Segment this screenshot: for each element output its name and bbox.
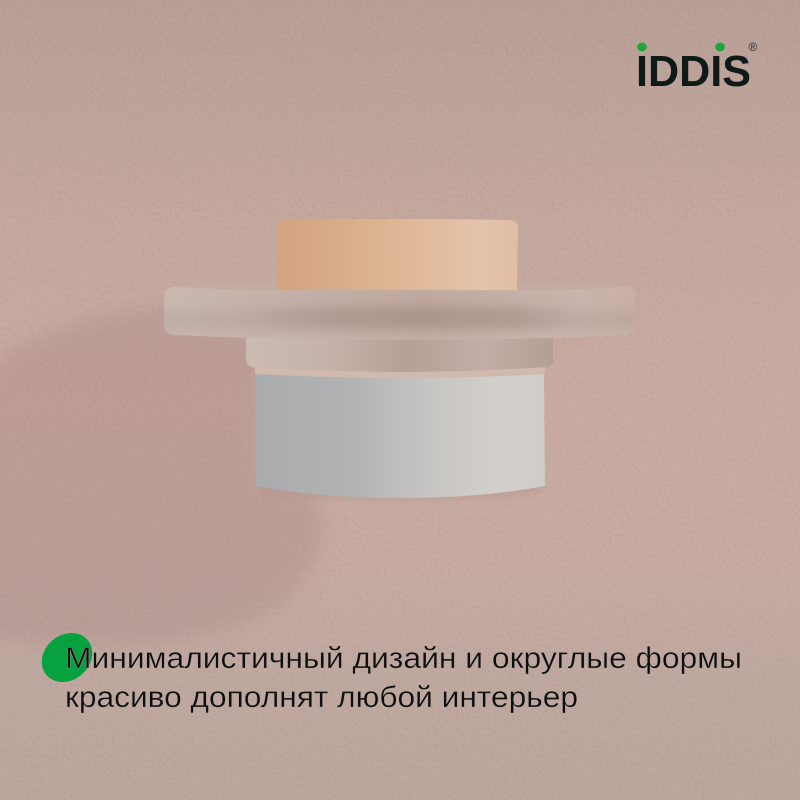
cast shadow on wall: [0, 306, 323, 644]
caption line 1: Минималистичный дизайн и округлые формы: [65, 642, 742, 675]
plate inner shade: [240, 307, 580, 327]
soft shadow under holder: [262, 484, 540, 501]
logo green dots: [637, 42, 725, 52]
registered mark: ®: [748, 40, 758, 54]
frosted glass plate: [164, 287, 635, 340]
collar lip: [255, 367, 545, 378]
white holder cylinder: [255, 372, 545, 498]
logo: IDDIS: [636, 40, 758, 96]
plate back rim: [176, 284, 626, 296]
soap bar: [277, 219, 518, 292]
caption line 2: красиво дополнят любой интерьер: [65, 681, 578, 714]
soap dish product: [164, 219, 635, 501]
logo wordmark: IDDIS: [636, 47, 751, 96]
frosted collar: [246, 336, 553, 373]
green accent blob: [32, 623, 102, 692]
caption text: [65, 642, 742, 714]
